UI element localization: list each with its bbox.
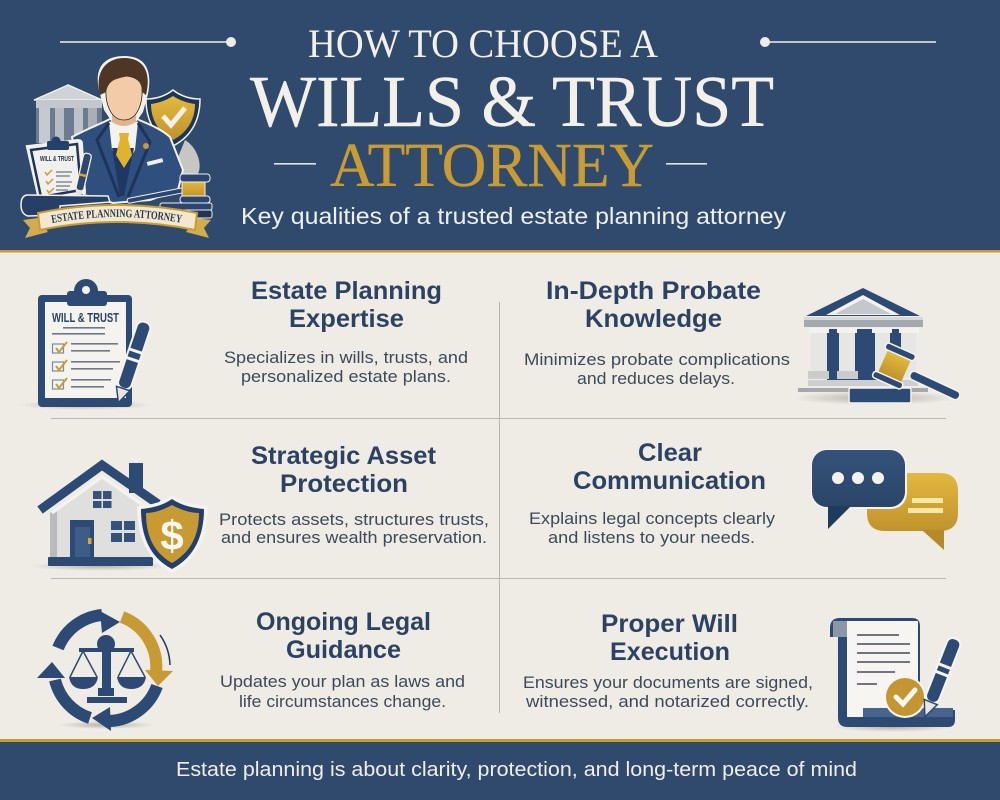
description bbox=[220, 673, 465, 711]
icon: signed document bbox=[830, 618, 962, 732]
banner bbox=[23, 204, 211, 238]
gavel bbox=[849, 342, 961, 403]
shirt and tie bbox=[97, 118, 163, 197]
heading: Guidance bbox=[286, 636, 401, 664]
heading: Clear bbox=[638, 439, 702, 467]
clipboard bbox=[28, 136, 84, 200]
icon: speech bubbles bbox=[811, 449, 958, 550]
heading: Ongoing Legal bbox=[256, 608, 431, 636]
gavel bbox=[127, 174, 212, 218]
description: life circumstances change. bbox=[239, 693, 446, 711]
book bbox=[21, 195, 110, 216]
icon: pen bbox=[112, 320, 152, 405]
grid dividers bbox=[51, 302, 946, 713]
heading: Execution bbox=[610, 638, 730, 666]
shield with check bbox=[146, 90, 200, 176]
icon: house with shield bbox=[30, 463, 208, 573]
clipboard: WILL & TRUST bbox=[40, 156, 74, 163]
banner: ESTATE PLANNING ATTORNEY bbox=[50, 209, 182, 223]
heading bbox=[256, 608, 431, 664]
icon: clipboard bbox=[19, 279, 152, 410]
panel: strategic asset protection bbox=[30, 442, 489, 573]
heading bbox=[251, 442, 437, 498]
description bbox=[524, 351, 790, 388]
panel: in-depth probate knowledge bbox=[524, 277, 961, 405]
description bbox=[523, 674, 813, 711]
heading: Protection bbox=[280, 470, 408, 498]
description: and reduces delays. bbox=[577, 370, 735, 388]
suit bbox=[72, 119, 183, 203]
panel: clear communication bbox=[529, 439, 958, 550]
description: Minimizes probate complications bbox=[524, 351, 790, 369]
title line 3: ATTORNEY bbox=[330, 132, 654, 200]
description: Protects assets, structures trusts, bbox=[219, 511, 489, 529]
description: Updates your plan as laws and bbox=[220, 673, 465, 691]
heading: Knowledge bbox=[585, 305, 722, 333]
icon: house with shield: $ bbox=[160, 512, 184, 559]
heading: Strategic Asset bbox=[251, 442, 437, 470]
heading bbox=[251, 277, 442, 333]
heading: In-Depth Probate bbox=[546, 277, 761, 305]
title line 1: HOW TO CHOOSE A bbox=[308, 21, 658, 66]
description bbox=[219, 511, 489, 547]
hero illustration: attorney bbox=[20, 56, 212, 238]
attorney side dashes bbox=[274, 163, 707, 165]
decorative line right bbox=[760, 37, 936, 47]
heading bbox=[601, 610, 738, 666]
decorative line left bbox=[60, 37, 236, 47]
heading: Communication bbox=[573, 467, 766, 495]
heading bbox=[573, 439, 766, 495]
description: Explains legal concepts clearly bbox=[529, 510, 776, 528]
panel: ongoing legal guidance bbox=[37, 608, 465, 731]
heading: Expertise bbox=[289, 305, 404, 333]
pen bbox=[918, 636, 962, 720]
description: Ensures your documents are signed, bbox=[523, 674, 813, 692]
footer text: Estate planning is about clarity, protection, and long-term peace of mind bbox=[176, 759, 857, 781]
subtitle: Key qualities of a trusted estate planning attorney bbox=[241, 203, 787, 229]
title bbox=[250, 21, 774, 200]
heading bbox=[546, 277, 761, 333]
icon: courthouse with gavel bbox=[793, 288, 961, 405]
description: and listens to your needs. bbox=[548, 529, 755, 547]
description: Specializes in wills, trusts, and bbox=[224, 349, 468, 367]
panel: proper will execution bbox=[523, 610, 962, 732]
description: witnessed, and notarized correctly. bbox=[525, 693, 809, 711]
neck, head and hair bbox=[98, 56, 149, 126]
icon: scales with cycle arrows bbox=[37, 611, 173, 731]
panel: estate planning expertise bbox=[19, 277, 468, 410]
icon: clipboard: WILL & TRUST bbox=[52, 310, 119, 325]
title line 2: WILLS & TRUST bbox=[250, 61, 774, 142]
description: and ensures wealth preservation. bbox=[221, 529, 487, 547]
description bbox=[224, 349, 468, 386]
footer band bbox=[0, 739, 1000, 800]
header band bbox=[0, 0, 1000, 252]
heading: Estate Planning bbox=[251, 277, 442, 305]
heading: Proper Will bbox=[601, 610, 738, 638]
description: personalized estate plans. bbox=[241, 368, 451, 386]
courthouse bbox=[34, 85, 102, 143]
pen bbox=[73, 153, 92, 200]
description bbox=[529, 510, 776, 547]
